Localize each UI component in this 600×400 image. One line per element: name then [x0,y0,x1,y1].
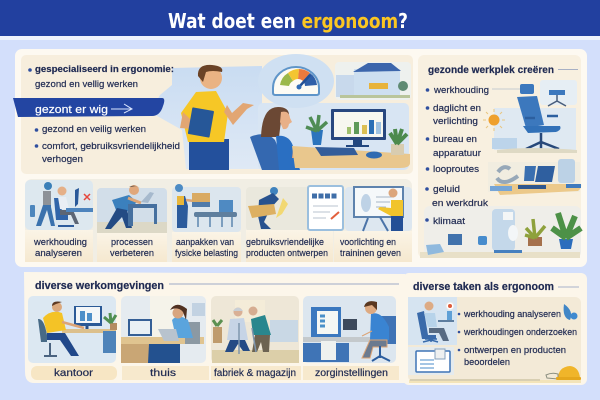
tile: werkhouding analyseren [25,180,93,262]
tile: kantoor [28,296,117,380]
icon: blue leaf [564,304,578,320]
desk with monitor, plants, keyboard and mouse [292,109,410,168]
tile: kantoor: kantoor [54,368,94,379]
bullet text block: specialisation: gezond en vellig werken [35,79,138,90]
illustration: climate unit and plants [420,206,581,258]
list of workplace factors: en werkdruk [432,198,488,209]
gauge bubble [258,54,334,108]
tile: zorginstellingen [303,296,399,380]
list of workplace factors: apparatuur [433,148,482,159]
icon: yellow hard hat [410,366,581,380]
tile: aanpakken van fysieke belasting: fysicke belasting [175,248,238,259]
hero illustration: ergonomist and desk worker [150,54,411,170]
list of workplace factors: verlichting [433,116,478,127]
tile: werkhouding analyseren: werkhouding [33,237,87,248]
list of workplace factors: werkhouding [433,85,489,96]
bullet list: goals: comfort, gebruiksvriendelijkheid [42,141,180,152]
heading: diverse werkomgevingen [35,280,164,292]
tile: voorlichting en trainingen geven [334,187,412,262]
tile: zorginstellingen: zorginstellingen [315,368,388,379]
list of workplace factors [425,85,489,227]
bullet list: tasks: werkhouding analyseren [463,309,561,319]
illustration: ergonomist at desk and clipboard [408,297,457,375]
tile: thuis [121,296,209,380]
illustration: ergonomic chair [492,80,577,153]
bullet list: goals: gezond en veilig werken [42,124,146,135]
heading: diverse taken als ergonoom [413,281,554,293]
tile: gebruiksvriendelijke producten ontwerpen: gebruiksvriendelijke [246,237,324,248]
header band [0,0,600,40]
title: Wat doet een ergonoom? [168,9,408,33]
bullet list: tasks: beoordelen [464,357,510,367]
icon: sun [483,109,505,131]
list of workplace factors: looproutes [433,164,479,175]
bullet text block: specialisation: gespecialiseerd in ergonomie: [35,64,174,75]
illustration: desk with monitors [488,159,581,195]
list of workplace factors: bureau en [433,134,477,145]
tile: werkhouding analyseren: analyseren [35,248,82,259]
tile: voorlichting en trainingen geven: voorlichting en [340,237,396,248]
tile: processen verbeteren: verbeteren [110,248,154,259]
tile: fabriek & magazijn: fabriek & magazijn [214,368,296,379]
bullet text block: specialisation [28,64,174,90]
tile: fabriek & magazijn [211,296,301,380]
bullet list: tasks [458,309,577,367]
bullet list: tasks: ontwerpen en producten [464,345,566,355]
tile: processen verbeteren: processen [111,237,153,248]
tile: gebruiksvriendelijke producten ontwerpen [246,186,345,262]
panel: gezonde werkplek creëren [420,64,581,258]
tile: aanpakken van fysieke belasting: aanpakken van [176,237,234,248]
tile: thuis: thuis [150,368,176,379]
panel: diverse werkomgevingen [24,272,405,383]
bullet list: goals: verhogen [42,154,83,165]
tile: gebruiksvriendelijke producten ontwerpen: producten ontwerpen [246,248,328,259]
bullet list: tasks: werkhoudingen onderzoeken [463,327,577,337]
heading: gezonde werkplek creëren [428,64,554,76]
panel: top cream card [15,49,587,267]
bullet list: goals [35,124,180,165]
list of workplace factors: daglicht en [433,103,481,114]
blue banner with arrow [13,98,164,117]
panel: task tiles row [25,179,412,262]
list of workplace factors: klimaat [433,216,465,227]
woman in office chair [250,107,333,170]
man in yellow shirt [180,65,254,170]
list of workplace factors: geluid [433,184,460,195]
tile: aanpakken van fysieke belasting [172,184,241,262]
panel: diverse taken als ergonoom [403,273,587,385]
tile: voorlichting en trainingen geven: traininen geven [340,248,401,259]
building [335,62,411,100]
blue banner with arrow: gezont er wig [35,104,108,116]
tile: processen verbeteren [97,185,167,262]
